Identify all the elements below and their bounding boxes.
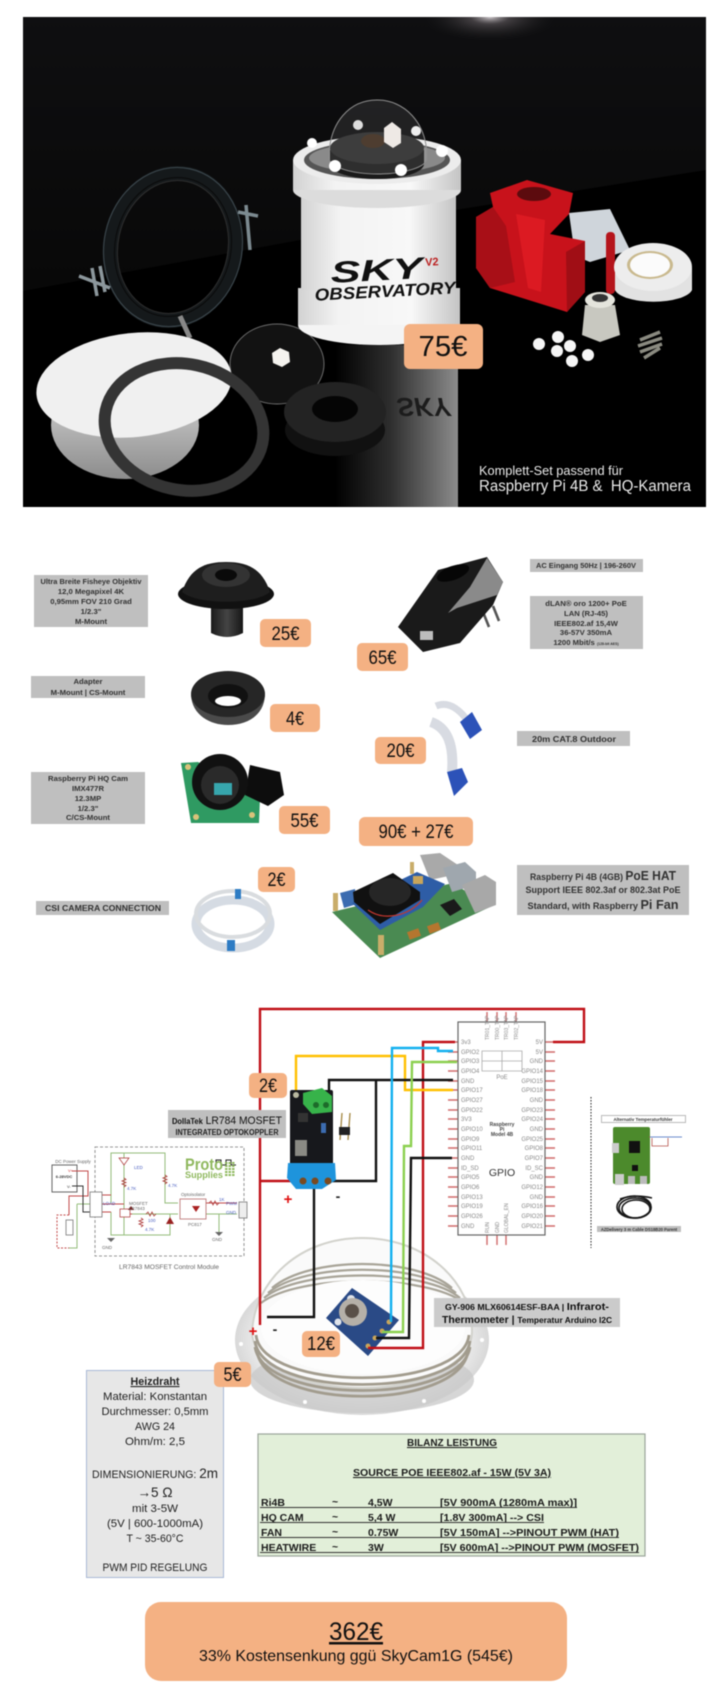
tape roll xyxy=(614,243,692,302)
wire specs xyxy=(102,1391,208,1448)
schematic text: PC817 xyxy=(188,1222,202,1227)
label: DollaTek MOSFET xyxy=(168,1110,286,1138)
cylinder reflection xyxy=(335,345,458,507)
wire: red power xyxy=(260,1009,584,1325)
PoE header: PoE xyxy=(496,1075,508,1081)
plate screws xyxy=(239,1338,484,1404)
desiccant pack xyxy=(569,209,630,262)
price: 55€ xyxy=(279,806,330,834)
red antenna xyxy=(606,232,615,294)
left pin labels: GND xyxy=(461,1156,475,1162)
schematic text: LOAD xyxy=(103,1201,116,1206)
model label: Pi xyxy=(500,1127,505,1133)
logo xyxy=(314,256,456,302)
power supply box: V+ xyxy=(68,1168,74,1173)
price: 25€: 25€ xyxy=(272,624,300,645)
polarity marks: + xyxy=(249,1323,258,1340)
price: 2€ MOSFET: 2€ xyxy=(259,1076,277,1097)
left pin labels xyxy=(461,1040,483,1230)
wire: red sensor supply xyxy=(368,1042,455,1348)
top and bottom pin labels: RUN xyxy=(485,1222,491,1233)
top and bottom pin labels xyxy=(485,1015,520,1233)
left pin labels: GPIO17 xyxy=(461,1088,483,1094)
top and bottom pin labels: TR02_TAP xyxy=(514,1015,520,1040)
left pin labels: GPIO11 xyxy=(461,1146,483,1152)
model label: Model 4B xyxy=(491,1132,513,1138)
left pin labels: 3v3 xyxy=(461,1040,471,1046)
price: 2€ CSI: 2€ xyxy=(268,870,286,891)
right pin labels: GPIO14 xyxy=(521,1069,544,1075)
schematic text: GND xyxy=(226,1210,237,1215)
wiring xyxy=(260,1009,584,1348)
right pin labels: 5V xyxy=(536,1040,543,1046)
wire: black ground xyxy=(327,1080,453,1338)
right pin labels: GND xyxy=(530,1098,544,1104)
wire specs: Material: Konstantan xyxy=(103,1391,207,1403)
power balance table xyxy=(258,1434,645,1556)
price: 75€: 75€ xyxy=(418,331,468,363)
top and bottom pin labels: TR03_TAP xyxy=(504,1015,510,1040)
right pin labels: GPIO21 xyxy=(521,1224,544,1230)
fisheye lens photo xyxy=(178,562,274,637)
label: Pi and PoE HAT: Support IEEE 802.3af or 802.3at PoE xyxy=(526,885,680,895)
label: IR thermometer xyxy=(434,1298,620,1327)
label: AC input xyxy=(530,559,643,572)
Proto Supplies logo: Proto xyxy=(185,1155,223,1174)
wire: green I2C xyxy=(382,1062,457,1332)
label: fisheye lens: 12,0 Megapixel 4K xyxy=(58,587,125,596)
row HQ CAM: 5,4 W xyxy=(368,1512,396,1524)
price: 20€ xyxy=(375,737,426,764)
right pin labels: 5V xyxy=(536,1050,543,1056)
dimensioning: (5V | 600-1000mA) xyxy=(107,1518,203,1530)
table heading: BILANZ LEISTUNG xyxy=(407,1437,497,1449)
right pin labels: ID_SC xyxy=(525,1166,544,1172)
right pin labels: GPIO20 xyxy=(521,1214,544,1220)
price: 2€ MOSFET xyxy=(249,1073,287,1098)
module frame xyxy=(95,1147,244,1256)
HQ camera photo xyxy=(181,754,284,823)
left pin labels: ID_SD xyxy=(461,1166,479,1172)
glass dome with heating wire xyxy=(235,1238,489,1415)
polarity marks xyxy=(249,1188,341,1340)
right pin labels: GND xyxy=(530,1175,544,1181)
left pin labels: GPIO3 xyxy=(461,1059,480,1065)
screws xyxy=(638,332,662,358)
schematic text: 4.7K xyxy=(145,1227,154,1232)
price: 4€: 4€ xyxy=(286,709,304,730)
left pin labels: GND xyxy=(461,1224,475,1230)
rear wire coils xyxy=(261,1264,464,1303)
price: 12€: 12€ xyxy=(307,1334,335,1355)
left pin labels: GPIO13 xyxy=(461,1195,483,1201)
power supply box: DC Power Supply xyxy=(55,1159,92,1164)
price: 5€: 5€ xyxy=(224,1365,242,1386)
row FAN: [5V 150mA] -->PINOUT PWM (HAT) xyxy=(440,1527,619,1539)
ribbon cable photo xyxy=(196,889,270,951)
label: adapter xyxy=(31,676,145,698)
schematic text: 4.7K xyxy=(127,1186,136,1191)
right pin labels: GND xyxy=(530,1127,544,1133)
dimensioning: →5 Ω xyxy=(138,1484,172,1500)
model label xyxy=(490,1122,515,1138)
black lens holder xyxy=(284,382,386,456)
label: HQ camera: IMX477R xyxy=(72,784,104,793)
power supply box: 6-28VDC xyxy=(56,1174,72,1179)
heading: Alternativ Temperaturfühler xyxy=(614,1117,673,1122)
components xyxy=(295,1140,307,1156)
interior floor xyxy=(261,1280,465,1374)
row Ri4B xyxy=(260,1496,577,1509)
schematic text: 4.7K xyxy=(168,1183,177,1188)
dimensioning: mit 3-5W xyxy=(132,1503,179,1515)
label: HQ camera: Raspberry Pi HQ Cam xyxy=(48,774,128,783)
price: 65€: 65€ xyxy=(368,648,397,669)
schematic caption: LR7843 MOSFET Control Module xyxy=(119,1264,219,1271)
left pin labels: GPIO4 xyxy=(461,1069,480,1075)
label: fisheye lens: 1/2.3" xyxy=(81,607,102,616)
label: Pi and PoE HAT xyxy=(517,865,689,915)
network cable photo xyxy=(431,704,482,796)
hero caption: Raspberry Pi 4B & HQ-Kamera xyxy=(479,478,691,495)
polarity marks: - xyxy=(273,1321,278,1337)
label: fisheye lens: 0,95mm FOV 210 Grad xyxy=(50,597,132,606)
light glare xyxy=(440,16,540,36)
label: CSI connection: CSI CAMERA CONNECTION xyxy=(45,903,161,913)
header pins xyxy=(339,1113,350,1140)
label: fisheye lens xyxy=(34,575,148,627)
schematic: LR7843 MOSFET control module xyxy=(52,1147,247,1271)
left pin labels: GND xyxy=(461,1079,475,1085)
label: IR thermometer: Thermometer | Temperatur Arduino I2C xyxy=(442,1315,612,1326)
alternative temperature sensor panel xyxy=(591,1097,686,1248)
right pin labels: GPIO23 xyxy=(521,1108,544,1114)
polarity marks: + xyxy=(284,1191,293,1208)
left pin labels: GPIO27 xyxy=(461,1098,483,1104)
cable gland xyxy=(582,292,620,342)
DS18B20 cable coil xyxy=(617,1196,652,1218)
divider xyxy=(590,1097,592,1248)
row FAN: 0.75W xyxy=(368,1527,398,1539)
label: HQ camera xyxy=(31,772,145,824)
schematic text: MOSFET xyxy=(129,1201,148,1206)
PoE header xyxy=(482,1051,522,1081)
total price: 362€ xyxy=(329,1618,383,1646)
label: dLAN xyxy=(530,596,643,649)
label: dLAN: dLAN® oro 1200+ PoE xyxy=(545,599,627,608)
hero product photo xyxy=(23,0,706,507)
small clear dome xyxy=(230,324,324,404)
top and bottom pin labels: TR00_TAP xyxy=(495,1015,501,1040)
dimensioning: DIMENSIONIERUNG: 2m xyxy=(92,1465,218,1481)
left pin labels: GPIO19 xyxy=(461,1204,483,1210)
Raspberry Pi with PoE HAT photo xyxy=(332,853,496,958)
price: 25€ xyxy=(260,619,311,647)
left pin labels: GPIO2 xyxy=(461,1050,480,1056)
blue terminal xyxy=(287,1163,336,1189)
right pin labels xyxy=(521,1040,544,1230)
left pin labels: GPIO26 xyxy=(461,1214,483,1220)
schematic text: Optoisolator xyxy=(181,1192,206,1197)
savings text: 33% Kostensenkung ggü SkyCam1G (545€) xyxy=(199,1648,513,1665)
row HQ CAM: [1.8V 300mA] --> CSI xyxy=(440,1512,544,1524)
dimensioning: T ~ 35-60°C xyxy=(126,1533,184,1545)
top and bottom pin labels: TR01_TAP xyxy=(485,1015,491,1040)
row HEATWIRE: HEATWIRE xyxy=(261,1542,316,1554)
label: dLAN: IEEE802.af 15,4W xyxy=(554,619,619,628)
red 3D printed camera mount xyxy=(476,180,585,312)
Proto Supplies logo: Supplies xyxy=(185,1170,223,1180)
wire: blue I2C xyxy=(391,1048,453,1322)
price: 75€ xyxy=(404,324,483,369)
row HQ CAM xyxy=(260,1511,544,1524)
logo: OBSERVATORY xyxy=(314,278,458,305)
right pin labels: GPIO7 xyxy=(525,1156,544,1162)
label: fisheye lens: M-Mount xyxy=(75,617,107,626)
white balls xyxy=(533,331,594,367)
label: dLAN: LAN (RJ-45) xyxy=(564,609,608,618)
schematic text: LED xyxy=(134,1165,144,1170)
flat sealing ring xyxy=(98,356,270,498)
base plate xyxy=(235,1265,489,1415)
wire specs: Ohm/m: 2,5 xyxy=(125,1436,185,1448)
Raspberry Pi top view xyxy=(612,1127,682,1185)
row FAN: ~ xyxy=(332,1526,338,1538)
price: 12€ xyxy=(302,1331,340,1357)
schematic text xyxy=(102,1165,237,1250)
power supply box: V- xyxy=(67,1184,71,1189)
right pin labels: GPIO15 xyxy=(521,1079,544,1085)
dome glass xyxy=(252,1238,472,1388)
wire: yellow signal xyxy=(296,1056,453,1090)
Proto Supplies logo xyxy=(185,1155,235,1180)
heating wire specification box xyxy=(86,1370,224,1578)
model label: Raspberry xyxy=(490,1122,515,1128)
pin stubs xyxy=(448,1012,555,1245)
right pin labels: GPIO18 xyxy=(521,1088,544,1094)
MOSFET module xyxy=(287,1088,350,1189)
top and bottom pin labels: GLOBAL_EN xyxy=(504,1203,510,1233)
pcb xyxy=(290,1090,333,1165)
logo: SKY xyxy=(330,252,428,290)
total cost banner xyxy=(145,1602,567,1681)
hero caption: Komplett-Set passend für xyxy=(479,463,624,478)
right pin labels: GPIO12 xyxy=(521,1185,544,1191)
row Ri4B: Ri4B xyxy=(261,1497,285,1509)
label: HQ camera: 12.3MP xyxy=(75,794,101,803)
label: cable xyxy=(517,731,630,746)
label: Pi and PoE HAT: Standard, with Raspberry Pi Fan xyxy=(528,898,678,912)
powerline adapter photo xyxy=(398,557,503,652)
schematic text: LR7843 xyxy=(129,1206,145,1211)
adapter ring photo xyxy=(191,671,265,725)
right pin labels: GPIO16 xyxy=(521,1204,544,1210)
schematic text: GND xyxy=(102,1245,113,1250)
green terminal xyxy=(303,1088,332,1114)
logo: V2 xyxy=(425,256,439,269)
label: fisheye lens: Ultra Breite Fisheye Objektiv xyxy=(40,577,142,586)
cable label: AZDelivery 3 m Cable DS18B20 Parent xyxy=(601,1227,678,1232)
label: adapter: M-Mount | CS-Mount xyxy=(51,688,126,697)
left pin labels: GPIO9 xyxy=(461,1137,480,1143)
row HEATWIRE: 3W xyxy=(368,1542,384,1554)
schematic text: PWM xyxy=(226,1201,237,1206)
traces xyxy=(57,1153,237,1248)
row Ri4B: ~ xyxy=(332,1496,338,1508)
label: cable: 20m CAT.8 Outdoor xyxy=(532,734,617,744)
label: dLAN: 1200 Mbit/s (128-bit AES) xyxy=(553,638,619,647)
right pin labels: GND xyxy=(530,1195,544,1201)
price: 55€: 55€ xyxy=(290,811,319,832)
polarity marks: - xyxy=(336,1188,341,1204)
label: DollaTek MOSFET: DollaTek LR784 MOSFET xyxy=(172,1115,282,1127)
top and bottom pin labels: GND xyxy=(495,1222,501,1233)
price: 65€ xyxy=(357,643,408,671)
connectors and parts xyxy=(66,1158,247,1242)
label: IR thermometer: GY-906 MLX60614ESF-BAA | Infrarot- xyxy=(445,1302,609,1313)
dome shadow xyxy=(250,1347,474,1413)
label: dLAN: 36-57V 350mA xyxy=(560,628,613,637)
row HEATWIRE: [5V 600mA] -->PINOUT PWM (MOSFET) xyxy=(440,1542,639,1554)
Raspberry Pi GPIO pinout xyxy=(448,1012,555,1245)
left pin labels: GPIO22 xyxy=(461,1108,483,1114)
right pin labels: GPIO24 xyxy=(521,1117,544,1123)
schematic text: GND xyxy=(212,1237,223,1242)
wire specs: Durchmesser: 0,5mm xyxy=(102,1406,208,1418)
price: 5€ xyxy=(214,1362,251,1387)
photo background xyxy=(22,16,707,292)
row FAN xyxy=(260,1526,619,1539)
label: HQ camera: 1/2.3" xyxy=(78,804,99,813)
left pin labels: GPIO5 xyxy=(461,1175,480,1181)
board outline xyxy=(458,1022,545,1235)
price: 90€ + 27€: 90€ + 27€ xyxy=(378,822,454,843)
wire: black heater return xyxy=(267,1183,314,1317)
row HEATWIRE: ~ xyxy=(332,1541,338,1553)
price: 90€ + 27€ xyxy=(359,817,473,846)
table surface xyxy=(99,170,706,280)
dimensioning xyxy=(92,1465,218,1545)
wire specs: AWG 24 xyxy=(135,1421,175,1433)
front wire coils xyxy=(255,1335,470,1396)
control: PWM PID REGELUNG xyxy=(102,1562,208,1574)
schematic text: 100 xyxy=(148,1218,156,1223)
cylinder reflection: SKY xyxy=(397,392,453,422)
white end cap xyxy=(31,323,237,479)
left pin labels: 3V3 xyxy=(461,1117,472,1123)
label: Pi and PoE HAT: Raspberry Pi 4B (4GB) PoE HAT xyxy=(530,869,676,883)
row HQ CAM: HQ CAM xyxy=(261,1512,304,1524)
resistors xyxy=(122,1175,219,1227)
price: 20€: 20€ xyxy=(386,741,415,762)
label: DollaTek MOSFET: INTEGRATED OPTOKOPPLER xyxy=(176,1128,279,1137)
GPIO heading: GPIO xyxy=(489,1167,515,1179)
label: HQ camera: C/CS-Mount xyxy=(66,813,110,822)
hero caption xyxy=(479,463,691,495)
row Ri4B: 4,5W xyxy=(368,1497,393,1509)
row HQ CAM: ~ xyxy=(332,1511,338,1523)
label: CSI connection xyxy=(36,901,169,915)
schematic text: 1K xyxy=(219,1197,225,1202)
label: adapter: Adapter xyxy=(73,677,103,686)
right pin labels: GPIO8 xyxy=(525,1146,544,1152)
pipe clamp ring xyxy=(79,154,258,340)
price: 2€ CSI xyxy=(258,867,295,892)
price: 4€ xyxy=(270,704,320,732)
heading xyxy=(602,1116,686,1122)
left pin labels: GPIO10 xyxy=(461,1127,483,1133)
IR temperature sensor xyxy=(326,1288,399,1356)
heading: Heizdraht xyxy=(130,1376,180,1388)
source line: SOURCE POE IEEE802.af - 15W (5V 3A) xyxy=(353,1467,551,1479)
row Ri4B: [5V 900mA (1280mA max)] xyxy=(440,1497,577,1509)
right pin labels: GND xyxy=(530,1059,544,1065)
row FAN: FAN xyxy=(261,1527,282,1539)
row HEATWIRE xyxy=(260,1541,639,1554)
label: AC input: AC Eingang 50Hz | 196-260V xyxy=(536,561,637,570)
right pin labels: GPIO25 xyxy=(521,1137,544,1143)
left pin labels: GPIO6 xyxy=(461,1185,480,1191)
white cylinder housing xyxy=(293,100,461,345)
power supply box xyxy=(52,1159,92,1192)
